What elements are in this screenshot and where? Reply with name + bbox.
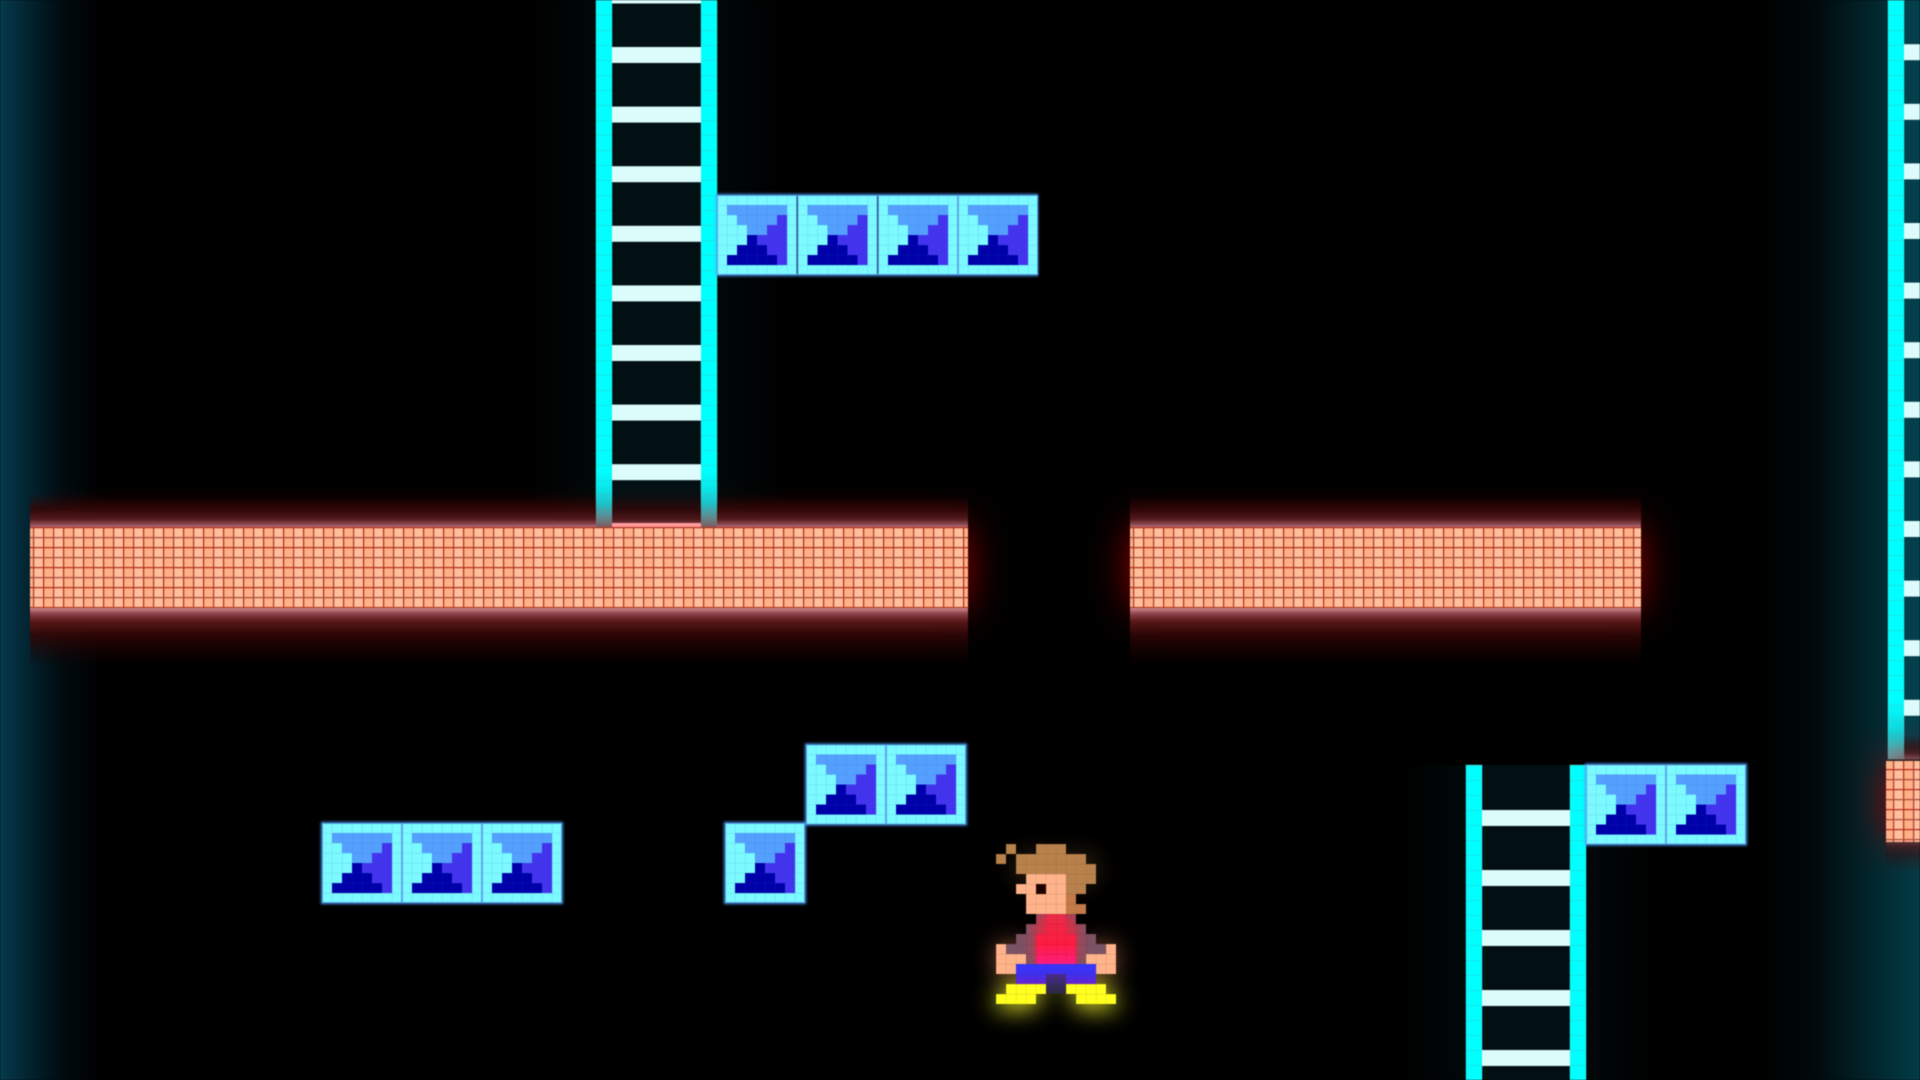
block: single lower step bbox=[725, 823, 805, 903]
platform: right edge red brick bbox=[1886, 735, 1920, 870]
ladder: upper left bbox=[596, 0, 717, 527]
blocks: lower left row of three bbox=[322, 823, 562, 903]
blocks: upper row of four bbox=[717, 195, 1038, 275]
character: pixel boy bbox=[996, 844, 1116, 1009]
ladder glow: lower right bbox=[1400, 765, 1652, 1080]
ladder: right edge bbox=[1888, 0, 1920, 759]
platform: middle red brick bbox=[1130, 495, 1641, 668]
left edge teal glow bbox=[0, 0, 100, 1080]
right edge teal glow bbox=[1760, 0, 1920, 1080]
blocks: right pair beside ladder bbox=[1586, 764, 1746, 844]
blocks: upper step pair bbox=[806, 744, 966, 824]
platform: left red brick bbox=[30, 495, 968, 668]
ladder: lower right bbox=[1466, 765, 1586, 1080]
ladder glow: upper left bbox=[530, 0, 782, 527]
